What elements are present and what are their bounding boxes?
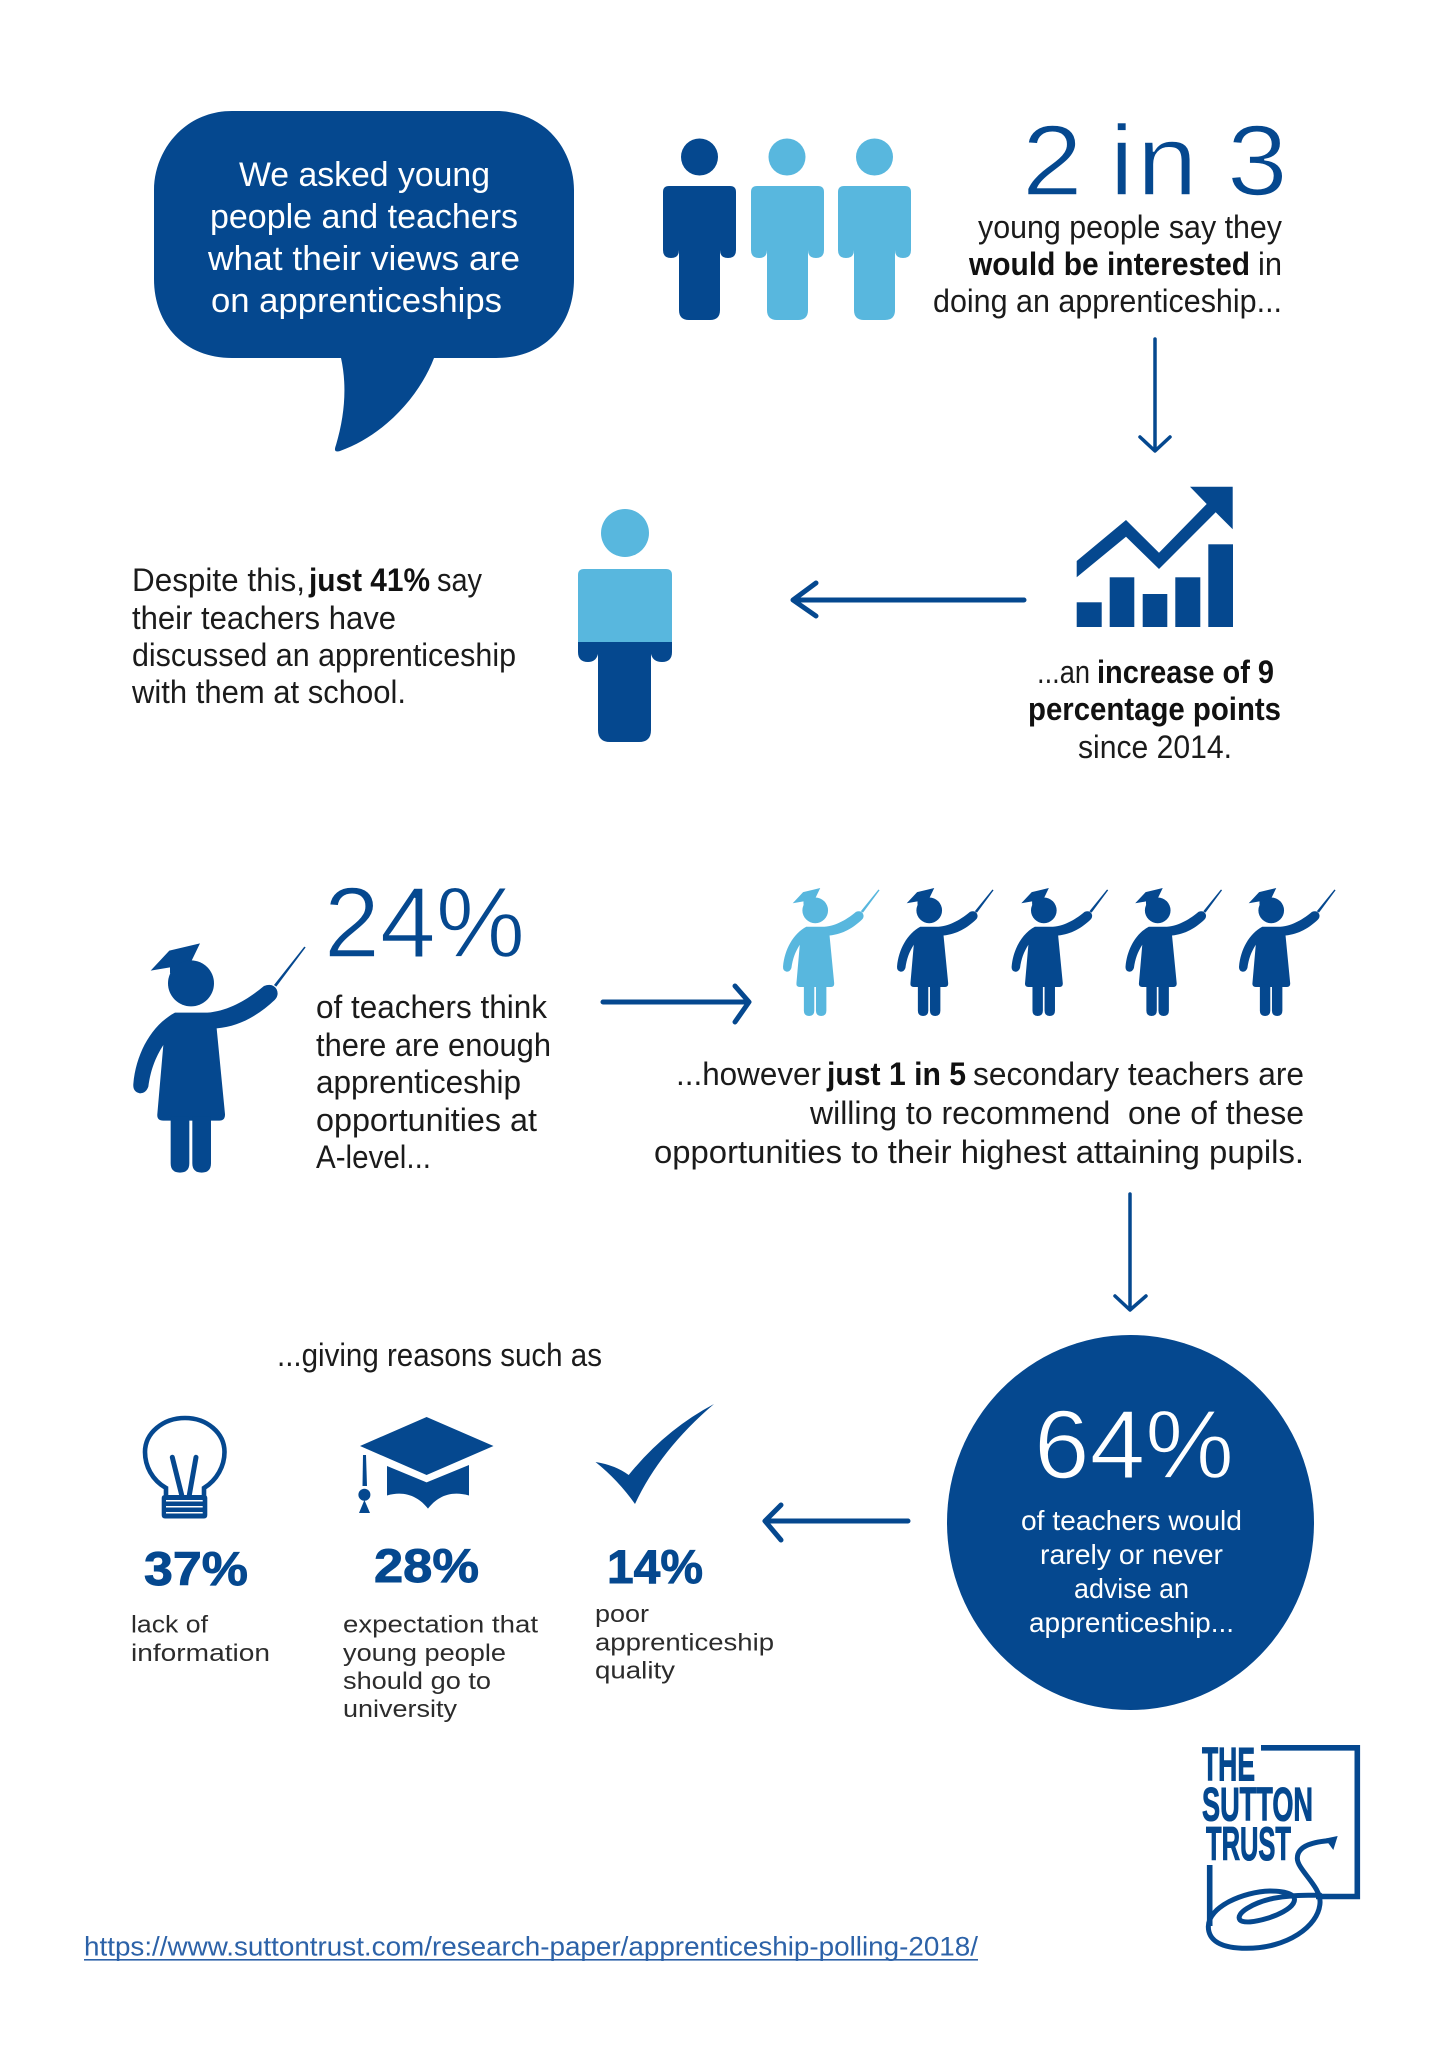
text: just 1 in 5 secondary teachers: ...however [676,1056,821,1092]
reason: lack of information: lack of [131,1612,208,1638]
text: increase of 9 percentage points: percentage points [1028,691,1281,727]
logo: The Sutton Trust [1202,1738,1357,1948]
reason: expectation of university: 28% [374,1539,479,1592]
heading: giving reasons: ...giving reasons such as [277,1337,602,1373]
icon: five teachers [783,888,1336,1016]
text: just 41 percent: Despite this, [132,562,305,598]
text: young people interested: young people say they [978,209,1282,245]
reason: lack of information: information [131,1640,270,1667]
source link: https://www.suttontrust.com/research-paper/apprenticeship-polling-2018/ [84,1932,979,1962]
statistic: 2 in 3: 2 in 3 [1022,105,1288,217]
text: teachers think enough opportunities [316,989,551,1175]
circle: 64 percent [947,1335,1314,1710]
text: just 1 in 5 secondary teachers [654,1056,1304,1170]
text: young people interested: would be interested [968,246,1250,282]
speech bubble: on apprenticeships [211,282,502,320]
arrow: right to teachers [603,986,749,1022]
speech bubble: what their views are [207,240,520,278]
reason: poor quality: 14% [607,1540,703,1593]
circle: 64 percent: rarely or never [1040,1539,1223,1570]
text: increase of 9 percentage points: increase of 9 [1097,654,1274,690]
icon: rising bar chart [1077,487,1233,627]
reason: lack of information [131,1418,270,1667]
circle: 64 percent: of teachers would [1021,1505,1242,1536]
text: increase of 9 percentage points [1028,654,1281,765]
text: just 41 percent: just 41% [308,562,430,598]
icon: large teacher [133,943,306,1173]
icon: check mark [596,1404,714,1504]
arrow: down to chart [1140,339,1170,451]
text: teachers think enough opportunities: opportunities at [316,1102,537,1138]
circle: 64 percent: apprenticeship... [1029,1607,1234,1638]
speech bubble: We asked young [239,156,490,194]
text: just 1 in 5 secondary teachers: opportunities to their highest attaining pupils. [654,1134,1304,1170]
text: young people interested: doing an apprenticeship... [933,283,1282,319]
reason: lack of information: 37% [144,1542,248,1595]
icon: person part filled [578,509,672,742]
arrow: left from chart [793,583,1024,616]
text: just 41 percent: with them at school. [131,674,406,710]
reason: expectation of university: young people [343,1640,506,1667]
speech bubble: people and teachers [210,198,518,236]
text: just 1 in 5 secondary teachers: just 1 in 5 [826,1056,966,1092]
arrow: down to circle [1115,1194,1146,1310]
text: increase of 9 percentage points: ...an [1037,654,1090,690]
icon: graduation cap [358,1417,494,1513]
circle: 64 percent: advise an [1074,1573,1189,1604]
circle: 64 percent: 64% [1034,1390,1234,1499]
text: young people interested: in [1258,246,1282,282]
text: teachers think enough opportunities: there are enough [316,1027,551,1063]
text: just 41 percent: their teachers have [132,600,396,636]
icon: three people [663,138,911,320]
text: just 1 in 5 secondary teachers: secondary teachers are [973,1056,1304,1092]
reason: poor quality [595,1404,774,1684]
text: increase of 9 percentage points: since 2014. [1078,729,1232,765]
reason: expectation of university: expectation that [343,1612,538,1638]
reason: expectation of university: university [343,1696,458,1723]
text: teachers think enough opportunities: A-level... [316,1139,431,1175]
text: just 41 percent [131,562,516,710]
text: young people interested [933,209,1282,319]
reason: poor quality: apprenticeship [595,1630,774,1656]
speech bubble [154,111,574,451]
arrow: left to reasons [765,1505,908,1540]
text: just 1 in 5 secondary teachers: willing to recommend one of these [809,1095,1304,1131]
reason: expectation of university [343,1417,538,1723]
text: teachers think enough opportunities: apprenticeship [316,1064,521,1100]
reason: poor quality: quality [595,1658,676,1684]
text: just 41 percent: discussed an apprenticeship [132,637,516,673]
reason: poor quality: poor [595,1601,649,1628]
logo: The Sutton Trust: TRUST [1206,1818,1291,1871]
statistic: 24 percent: 24% [324,867,525,979]
logo: The Sutton Trust: SUTTON [1202,1778,1313,1832]
reason: expectation of university: should go to [343,1668,491,1695]
text: just 41 percent: say [437,562,482,598]
logo: The Sutton Trust: THE [1202,1738,1255,1792]
icon: light bulb [145,1418,224,1518]
text: teachers think enough opportunities: of teachers think [316,989,548,1025]
